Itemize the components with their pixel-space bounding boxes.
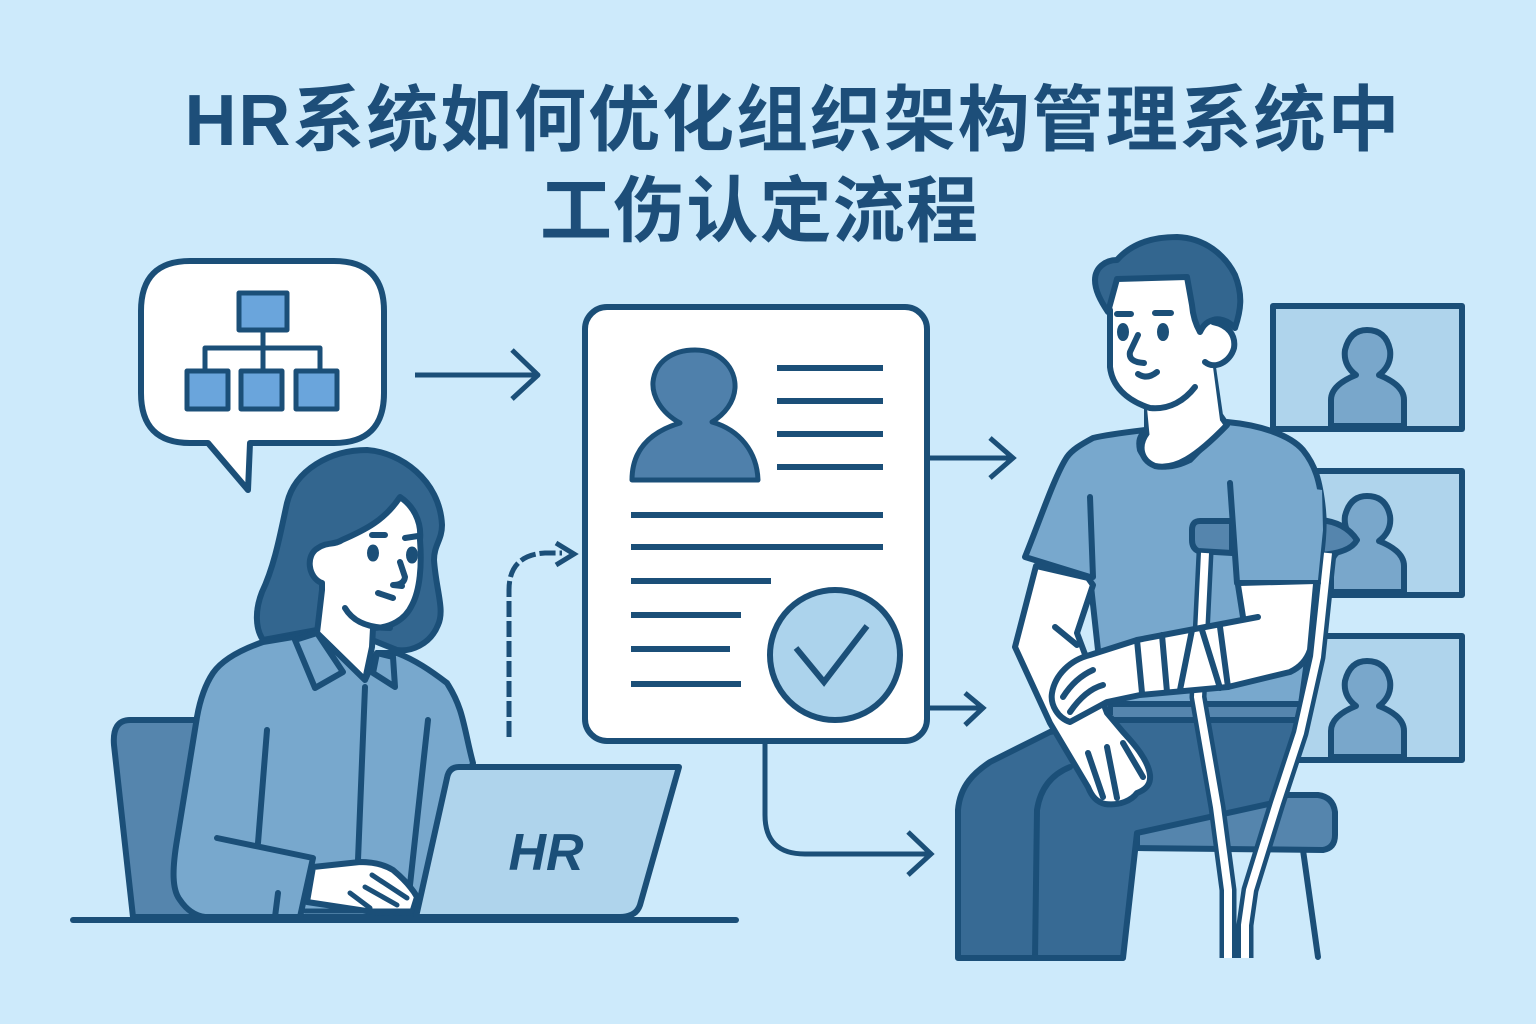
chair (114, 720, 205, 917)
arrow: document to employee top (930, 438, 1013, 478)
neck (1142, 365, 1227, 467)
trousers (1113, 705, 1305, 722)
bandaged forearm (1052, 617, 1258, 722)
panels: video tiles (1273, 306, 1462, 760)
chair seat and leg (1303, 850, 1318, 957)
shirt (1025, 422, 1324, 712)
title: 工伤认定流程 (540, 172, 978, 252)
laptop label: HR (508, 824, 584, 882)
crutch rear pad (1320, 520, 1357, 555)
title (184, 81, 1400, 252)
face (1108, 277, 1235, 440)
face details (1117, 313, 1171, 377)
icon: approval check (770, 590, 900, 720)
figure: injured employee on chair (958, 237, 1357, 958)
collar (295, 633, 395, 688)
arrow: document to employee bottom (765, 743, 931, 875)
icon: profile avatar (632, 350, 758, 480)
crutch front pad (1192, 521, 1232, 553)
arrow: bubble to document (415, 350, 538, 399)
shirt seams (217, 687, 428, 917)
face details (345, 535, 418, 628)
crutch (1198, 553, 1328, 958)
shirt (174, 633, 473, 917)
text lines (631, 368, 883, 684)
panel: document (585, 307, 927, 741)
title: HR系统如何优化组织架构管理系统中 (184, 81, 1400, 161)
icon: org chart (187, 293, 337, 409)
sleeve (1230, 480, 1323, 583)
arrow: dashed HR to document (509, 543, 574, 737)
speech bubble: org chart (141, 261, 384, 490)
hand (307, 862, 417, 913)
left arm and lower hand (1015, 566, 1150, 804)
desk line (73, 917, 736, 923)
laptop (416, 767, 679, 917)
hair (1095, 237, 1240, 332)
arrow: document to employee middle (930, 693, 983, 725)
figure: HR worker at laptop (114, 450, 473, 917)
face and neck (310, 497, 421, 680)
right upper arm (1228, 584, 1316, 687)
hair (257, 450, 442, 650)
